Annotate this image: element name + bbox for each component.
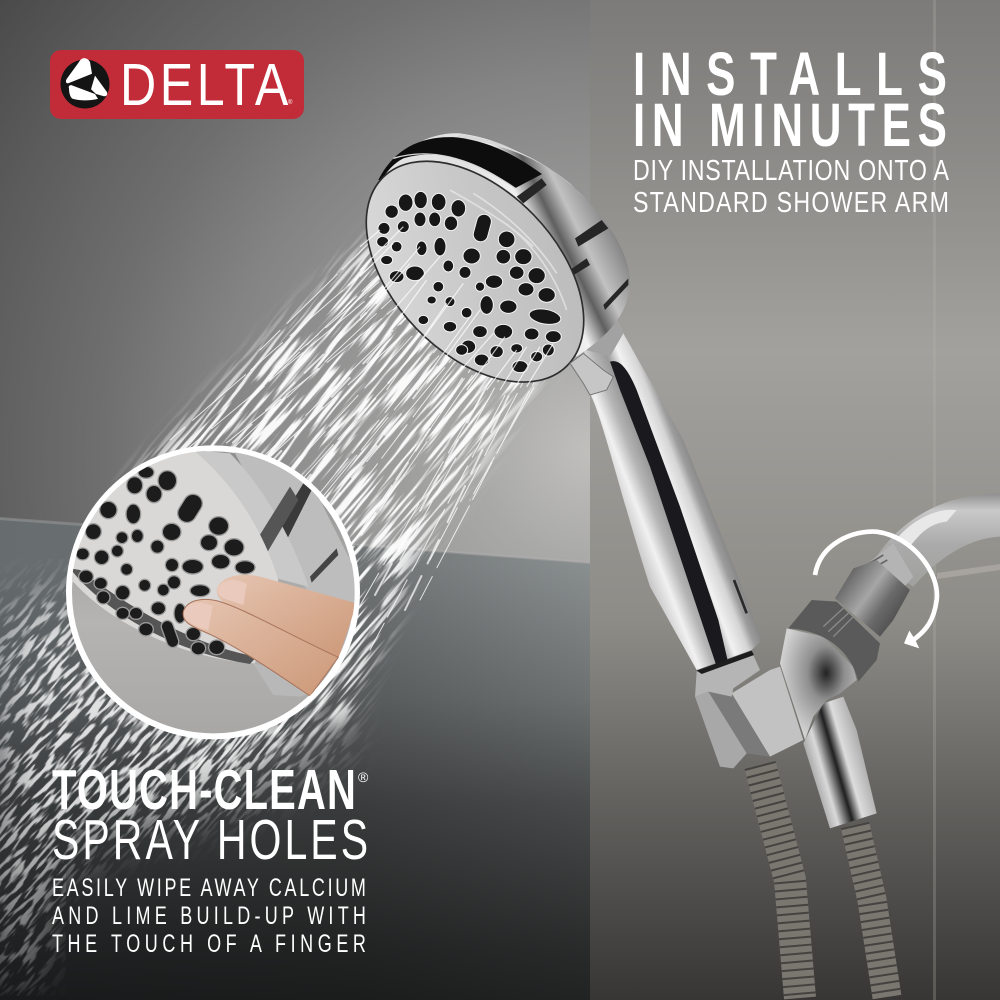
headline: Touch-Clean spray holes: SPRAY HOLES bbox=[52, 807, 368, 872]
headline: installs in minutes: IN MINUTES bbox=[633, 92, 947, 160]
bracket clip bbox=[695, 692, 747, 768]
threaded section bbox=[870, 543, 913, 592]
handle collar bbox=[695, 652, 760, 697]
logo emblem bbox=[60, 58, 110, 108]
water over the face bbox=[360, 227, 553, 390]
lower fingernail bbox=[184, 603, 213, 631]
water spray bbox=[0, 230, 546, 996]
upper fingernail bbox=[217, 580, 247, 605]
background: right tiled wall bbox=[590, 0, 1000, 1000]
subtext: wipe away calcium: EASILY WIPE AWAY CALCIUM bbox=[52, 873, 366, 902]
grey nut bbox=[788, 600, 880, 682]
subtext: DIY installation: DIY INSTALLATION ONTO A bbox=[633, 153, 949, 187]
upper finger bbox=[217, 575, 357, 658]
chrome front rim bbox=[512, 173, 602, 350]
lower finger bbox=[183, 599, 338, 696]
head-to-handle joint bbox=[570, 353, 613, 395]
dark top band bbox=[378, 137, 543, 193]
spray face bbox=[325, 120, 625, 423]
headline: installs in minutes bbox=[633, 41, 947, 160]
subtext: DIY installation bbox=[633, 153, 949, 219]
shower head bbox=[325, 120, 630, 423]
inset lower handle bbox=[253, 663, 310, 697]
mount and shower arm bbox=[695, 493, 1000, 828]
spray holes bbox=[377, 191, 562, 373]
subtext: wipe away calcium: THE TOUCH OF A FINGER bbox=[52, 929, 366, 958]
subtext: DIY installation: STANDARD SHOWER ARM bbox=[633, 185, 949, 219]
handle dark reflection bbox=[610, 361, 728, 667]
handle button bbox=[734, 580, 747, 613]
bracket ball bbox=[780, 628, 857, 740]
Delta logo bbox=[50, 50, 304, 119]
face scratches bbox=[450, 190, 567, 310]
head back housing bbox=[380, 133, 630, 357]
outer edge highlight bbox=[457, 134, 587, 200]
headline: installs in minutes: INSTALLS bbox=[633, 41, 947, 109]
headline: Touch-Clean spray holes: TOUCH-CLEAN bbox=[52, 758, 356, 822]
registered mark: ® bbox=[288, 99, 293, 106]
background: left wall bbox=[0, 0, 590, 1000]
inset chrome rim bbox=[193, 450, 308, 587]
logo wordmark: DELTA bbox=[120, 51, 289, 118]
inset spray face bbox=[60, 450, 278, 663]
headline: Touch-Clean spray holes bbox=[52, 758, 369, 872]
subtext: wipe away calcium bbox=[52, 873, 366, 958]
shower arm bbox=[873, 493, 1000, 587]
inset holes bbox=[76, 466, 255, 655]
adapter cylinder bbox=[835, 560, 910, 637]
shower handle bbox=[580, 320, 762, 670]
handle neck bbox=[580, 320, 623, 357]
inset head housing bbox=[233, 450, 360, 610]
hoses bbox=[760, 765, 887, 998]
hose connector bbox=[803, 697, 877, 828]
inset detail circle bbox=[60, 448, 360, 736]
rotation arrow bbox=[815, 532, 937, 648]
subtext: wipe away calcium: AND LIME BUILD-UP WITH bbox=[52, 901, 366, 930]
headline: Touch-Clean spray holes: ® bbox=[358, 769, 369, 785]
bracket body bbox=[732, 667, 803, 757]
